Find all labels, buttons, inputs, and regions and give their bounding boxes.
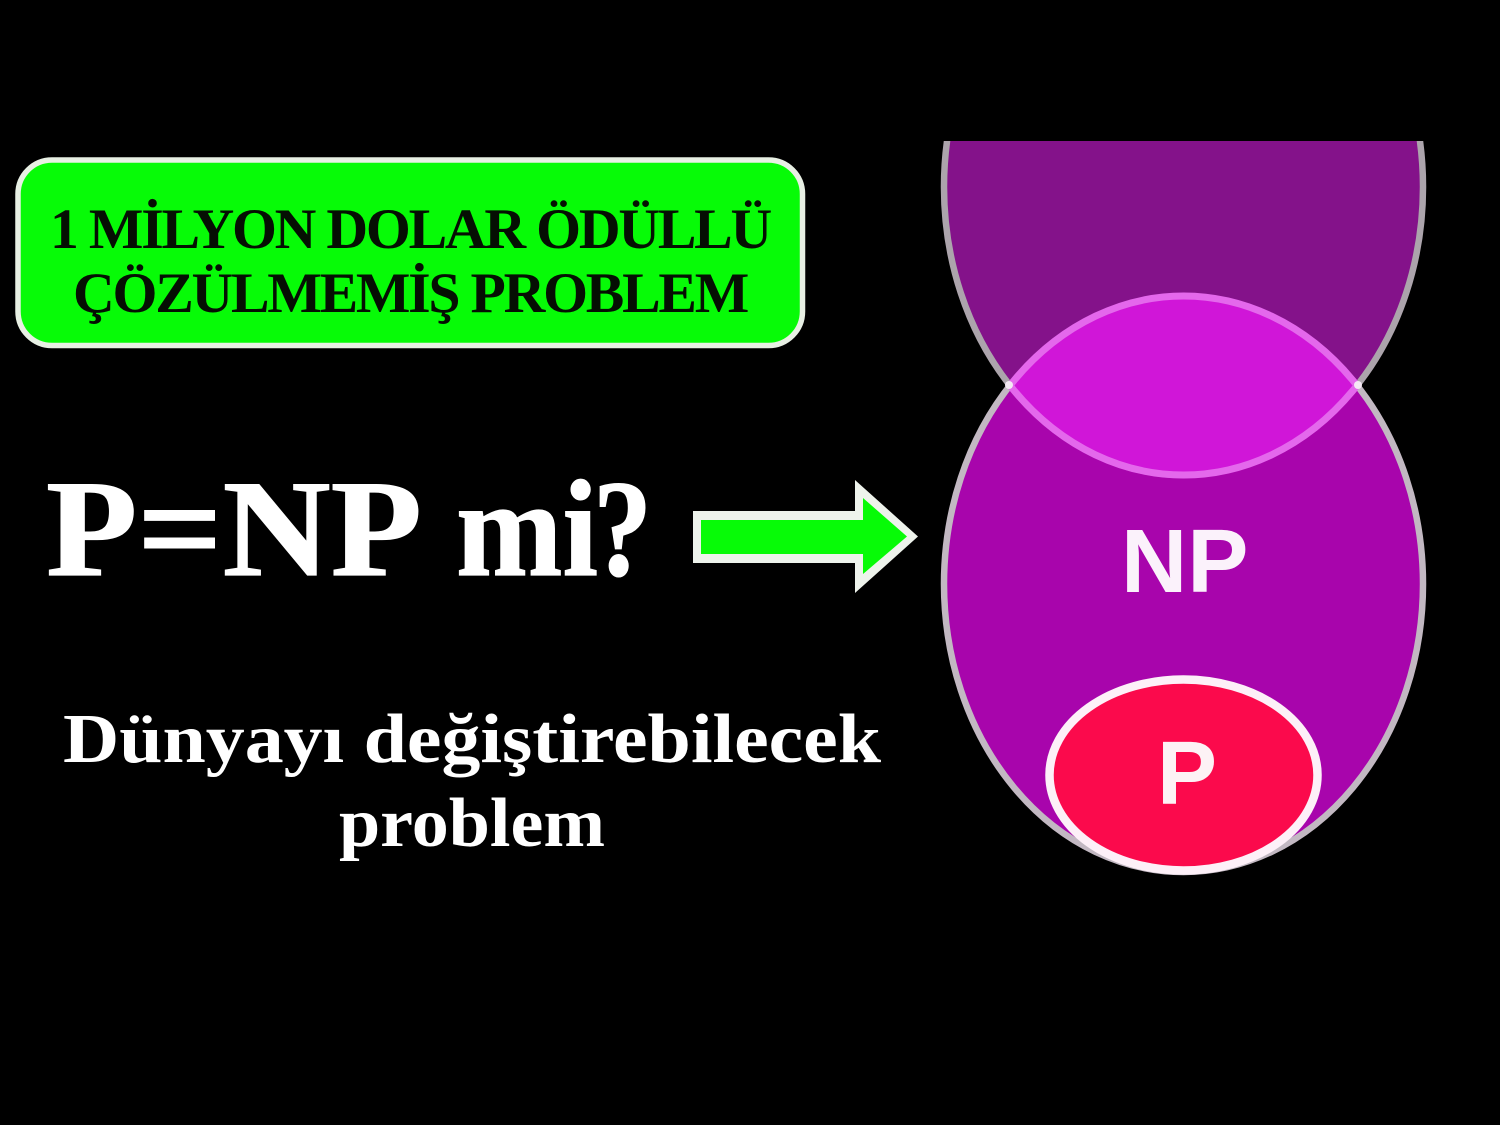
heading: P=NP mi?: mi bbox=[456, 452, 598, 605]
overlap region bbox=[1009, 292, 1358, 472]
upper dark region bbox=[940, 141, 1426, 478]
subtitle: world-changing problem: problem bbox=[339, 785, 605, 862]
diagram: complexity classes bbox=[940, 141, 1426, 876]
heading: P=NP mi?: ? bbox=[593, 452, 652, 605]
overlap lower outline bbox=[1008, 386, 1359, 478]
NP label: NP bbox=[1121, 512, 1248, 612]
P label: P bbox=[1157, 724, 1217, 824]
subtitle: world-changing problem: Dünyayı değiştirebilecek bbox=[63, 701, 881, 778]
banner text line 2: ÇÖZÜLMEMİŞ PROBLEM bbox=[73, 262, 748, 325]
P ellipse bbox=[1050, 680, 1318, 870]
NP ellipse bbox=[944, 296, 1423, 872]
arrow: green pointing to diagram bbox=[693, 480, 918, 593]
heading: P=NP mi?: P=NP bbox=[46, 452, 422, 605]
subtitle: world-changing problem bbox=[63, 701, 881, 862]
banner text line 1: 1 MİLYON DOLAR ÖDÜLLÜ bbox=[50, 198, 771, 261]
heading: P=NP mi? bbox=[46, 452, 652, 605]
banner: prize problem bbox=[18, 160, 802, 346]
crossing highlights bbox=[1005, 381, 1362, 389]
